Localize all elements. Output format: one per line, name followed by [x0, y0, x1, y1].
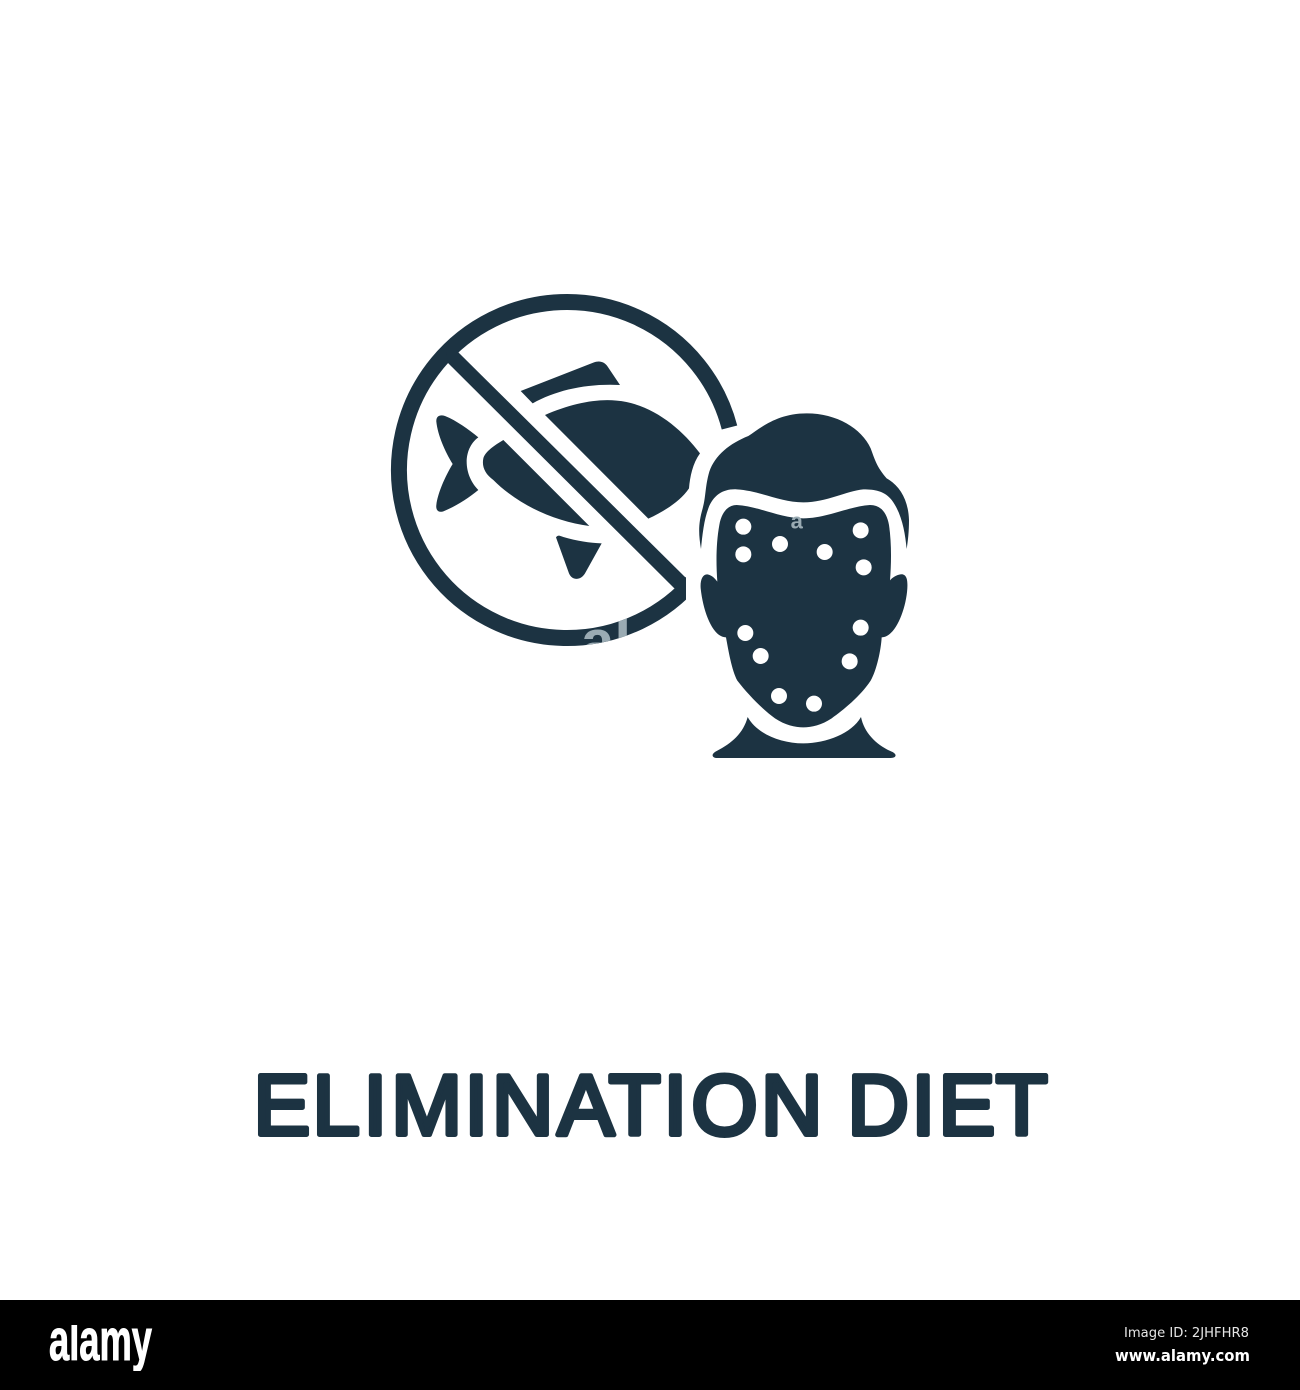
- fish body lower half: [483, 440, 589, 526]
- fish tail: [436, 415, 478, 512]
- image id: Image ID: 2JHFHR8: [1124, 1325, 1249, 1341]
- icon: head with skin rash: [699, 413, 909, 758]
- footer logo: alamy: [49, 1308, 152, 1373]
- fish bottom fin: [556, 536, 602, 579]
- watermark fragment on ring: ala: [581, 608, 665, 675]
- icon: no fish prohibition sign: [399, 302, 730, 675]
- title: ELIMINATION DIET: [254, 1058, 1048, 1154]
- hair: [699, 413, 909, 549]
- footer bar: [0, 1300, 1300, 1390]
- prohibition ring: [399, 302, 730, 638]
- fish body upper half: [545, 400, 700, 519]
- infographic canvas: [0, 294, 1300, 1390]
- rash dots: [735, 519, 872, 712]
- neck and shoulders: [713, 717, 896, 758]
- fish top fin: [521, 362, 620, 403]
- watermark fragment on face: a: [791, 509, 804, 534]
- face with ears: [701, 505, 907, 727]
- prohibition slash: [446, 352, 686, 596]
- ring end trim: [686, 565, 710, 610]
- footer url: www.alamy.com: [1115, 1346, 1250, 1365]
- icon: crossed out fish: [436, 362, 700, 579]
